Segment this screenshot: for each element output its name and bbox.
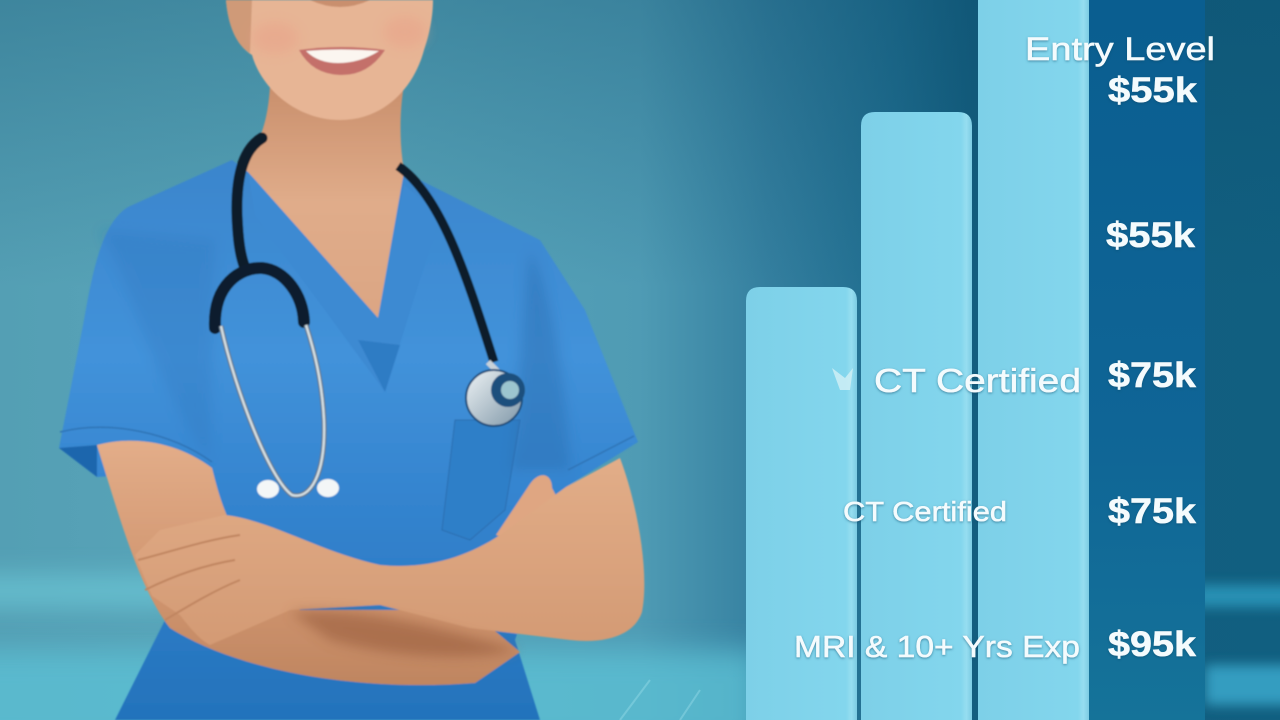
label: MRI and experience: MRI & 10+ Yrs Exp xyxy=(794,629,1080,664)
pocket xyxy=(442,420,520,540)
label: CT Certified upper: CT Certified xyxy=(874,362,1081,399)
yoke xyxy=(215,268,304,328)
neck xyxy=(238,85,408,320)
collar v-neck xyxy=(248,172,440,392)
label: Entry Level: Entry Level xyxy=(1025,31,1215,67)
scrub top xyxy=(59,160,638,720)
bar: level one xyxy=(746,287,857,720)
sleeve seam right xyxy=(568,436,634,470)
finger lines xyxy=(138,535,240,620)
salary: $95k: $95k xyxy=(1108,625,1197,664)
arm: under xyxy=(97,441,520,685)
salary: second $75k: $75k xyxy=(1108,492,1197,531)
label: CT Certified lower: CT Certified xyxy=(843,496,1007,527)
nurse figure xyxy=(59,0,644,720)
small check mark icon xyxy=(832,368,853,390)
bar: level two xyxy=(861,112,972,720)
tube: right xyxy=(398,166,494,362)
smile xyxy=(299,47,385,75)
metal binaurals xyxy=(221,325,324,496)
sleeve seam left xyxy=(60,427,212,462)
salary: first $75k: $75k xyxy=(1108,356,1197,395)
ear tips xyxy=(257,480,279,498)
salary: first $55k: $55k xyxy=(1108,71,1198,110)
face xyxy=(226,0,433,120)
chest piece xyxy=(466,362,525,426)
dark salary panel xyxy=(1089,0,1205,720)
tube: left xyxy=(237,138,262,268)
arm shadow xyxy=(290,611,518,657)
sleeve underside xyxy=(59,445,97,477)
bar chart: salary progression xyxy=(746,0,1089,720)
hand: fingers right xyxy=(496,475,561,540)
stethoscope xyxy=(215,138,525,498)
chest shadow xyxy=(100,230,215,460)
arm: over xyxy=(135,458,644,645)
salary: second $55k: $55k xyxy=(1106,216,1196,255)
bar: level three xyxy=(978,0,1089,720)
